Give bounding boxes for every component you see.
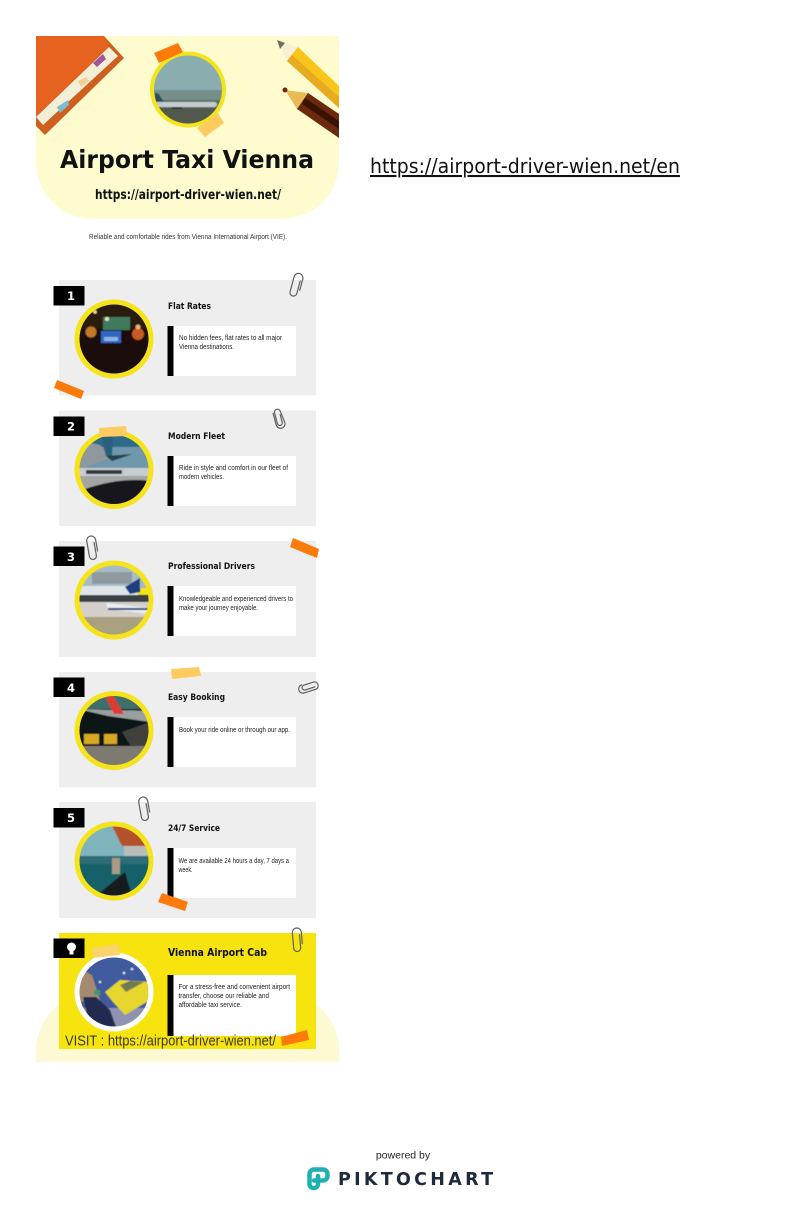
- text card: Book your ride online or through our app.: [179, 727, 290, 734]
- icon: paperclip: [138, 796, 151, 821]
- visit link: VISIT : https://airport-driver-wien.net/: [65, 1034, 277, 1050]
- header photo: plane on runway: [150, 52, 226, 130]
- tape: [99, 426, 127, 437]
- icon: brown pencil: [282, 88, 339, 138]
- number badge 5: [54, 808, 84, 828]
- tape: [290, 538, 319, 558]
- number badge 2: 2: [67, 420, 75, 434]
- text card: [168, 717, 296, 767]
- heading: Flat Rates: [168, 302, 211, 312]
- text card: [168, 586, 296, 636]
- website url: https://airport-driver-wien.net/: [95, 188, 281, 203]
- icon: paperclip: [86, 535, 99, 560]
- text card: [168, 326, 296, 376]
- title: Airport Taxi Vienna: [60, 145, 314, 174]
- text card: For a stress-free and convenient airport: [178, 984, 290, 991]
- icon: paperclip: [272, 408, 286, 429]
- panel 6: vienna airport cab: [54, 928, 316, 1050]
- photo: yellow taxi: [74, 952, 154, 1032]
- photo: planes on apron: [74, 560, 154, 640]
- text card: [168, 456, 296, 506]
- number badge 3: [54, 546, 84, 566]
- number badge 1: [54, 286, 84, 306]
- external link: https://airport-driver-wien.net/en: [370, 154, 680, 178]
- heading: 24/7 Service: [168, 824, 220, 834]
- text card: [168, 975, 296, 1036]
- text card: [168, 848, 296, 898]
- icon: paperclip: [298, 680, 319, 694]
- photo: taxi interior at night: [74, 300, 154, 378]
- tape: [171, 667, 201, 679]
- text card: make your journey enjoyable.: [179, 605, 258, 612]
- header banner: [36, 36, 339, 219]
- number badge 3: 3: [67, 550, 75, 564]
- footer cream arch: [36, 1000, 339, 1062]
- number badge 2: [54, 416, 84, 436]
- logo mark: [310, 1170, 328, 1188]
- heading: Professional Drivers: [168, 562, 255, 572]
- panel 4: easy booking: [54, 667, 319, 788]
- text card: week.: [178, 867, 193, 874]
- heading: Easy Booking: [168, 693, 225, 703]
- icon: paperclip: [289, 272, 304, 297]
- number badge 5: 5: [67, 811, 75, 825]
- heading: Modern Fleet: [168, 432, 226, 442]
- heading: Vienna Airport Cab: [168, 947, 267, 959]
- tape: [281, 1030, 309, 1046]
- subtitle: Reliable and comfortable rides from Vienna International Airport (VIE).: [89, 234, 287, 241]
- tape: [54, 380, 84, 399]
- photo: airport lounge: [74, 822, 154, 900]
- panel 1: flat rates: [54, 272, 316, 399]
- photo: aircraft tail: [74, 430, 154, 509]
- tape: [158, 893, 188, 911]
- icon: yellow pencil: [277, 40, 339, 108]
- text card: affordable taxi service.: [178, 1002, 242, 1009]
- text card: Vienna destinations.: [179, 344, 234, 351]
- tape: orange: [154, 43, 183, 63]
- panel 5: 24/7 service: [54, 796, 316, 918]
- text card: Knowledgeable and experienced drivers to: [179, 596, 293, 603]
- logo wordmark: PIKTOCHART: [338, 1170, 493, 1190]
- piktochart logo: [310, 1170, 493, 1190]
- number badge 4: 4: [67, 681, 75, 695]
- text card: transfer, choose our reliable and: [178, 993, 269, 1000]
- text card: No hidden fees, flat rates to all major: [179, 335, 283, 342]
- panel 3: professional drivers: [54, 535, 319, 657]
- text card: modern vehicles.: [179, 474, 224, 481]
- panel 2: modern fleet: [54, 408, 316, 526]
- tape: [91, 944, 120, 958]
- tape: yellow: [197, 113, 224, 137]
- text card: We are available 24 hours a day, 7 days a: [178, 858, 289, 865]
- number badge 4: [54, 678, 84, 697]
- photo: taxis under terminal: [74, 691, 154, 770]
- text card: Ride in style and comfort in our fleet of: [179, 465, 288, 472]
- icon: light bulb: [67, 942, 76, 954]
- number badge 1: 1: [67, 289, 75, 303]
- icon badge: light bulb: [54, 938, 84, 958]
- icon: paperclip: [292, 928, 303, 952]
- powered by label: powered by: [376, 1150, 431, 1162]
- icon: notebook: [36, 36, 124, 135]
